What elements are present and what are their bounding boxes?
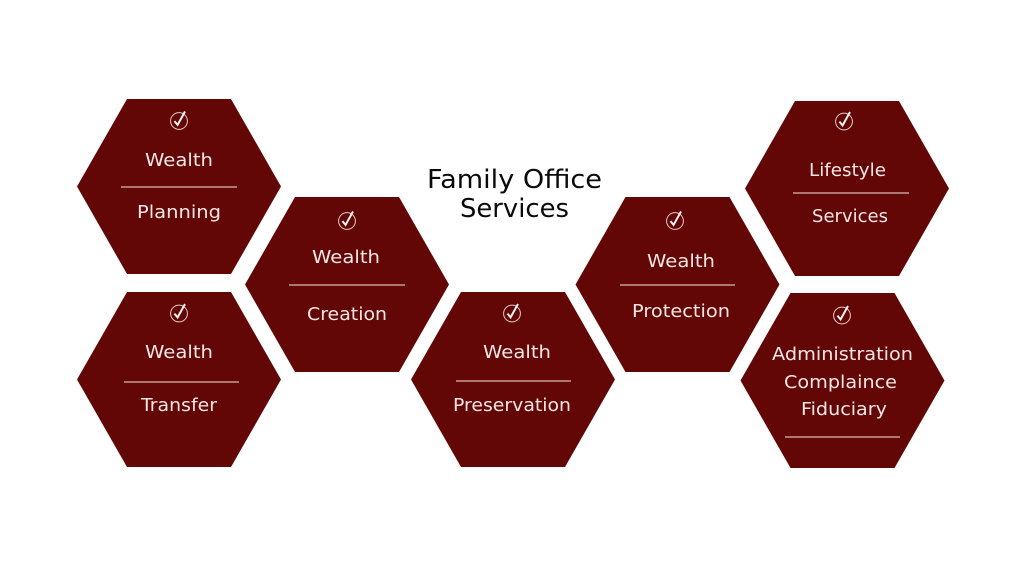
panel: Wealth Protection [576, 197, 780, 372]
panel: Administration Complaince Fiduciary: Fiduciary [801, 400, 887, 420]
panel: Administration Complaince Fiduciary [740, 293, 944, 468]
panel: Wealth Preservation: Preservation [453, 396, 571, 416]
panel: Wealth Protection: Protection [632, 302, 730, 322]
panel: Wealth Preservation [411, 292, 615, 467]
panel: Administration Complaince Fiduciary: Administration [772, 345, 913, 365]
panel: Wealth Creation [245, 197, 449, 372]
panel: Administration Complaince Fiduciary: Complaince [784, 373, 897, 393]
panel: Lifestyle Services [745, 101, 949, 276]
title [427, 165, 602, 224]
panel: Lifestyle Services: Lifestyle [809, 161, 886, 181]
title: Family Office [427, 165, 602, 195]
panel: Wealth Transfer: Wealth [145, 343, 213, 363]
panel: Lifestyle Services: Services [812, 207, 888, 227]
panel: Wealth Transfer: Transfer [140, 396, 218, 416]
panel: Wealth Planning: Planning [137, 203, 221, 223]
panel: Wealth Creation: Creation [307, 305, 387, 325]
panel: Wealth Protection: Wealth [647, 252, 715, 272]
panel: Wealth Preservation: Wealth [483, 343, 551, 363]
panel: Wealth Planning [77, 99, 281, 274]
panel: Wealth Creation: Wealth [312, 248, 380, 268]
title: Services [460, 194, 569, 224]
panel: Wealth Planning: Wealth [145, 151, 213, 171]
panel: Wealth Transfer [77, 292, 281, 467]
